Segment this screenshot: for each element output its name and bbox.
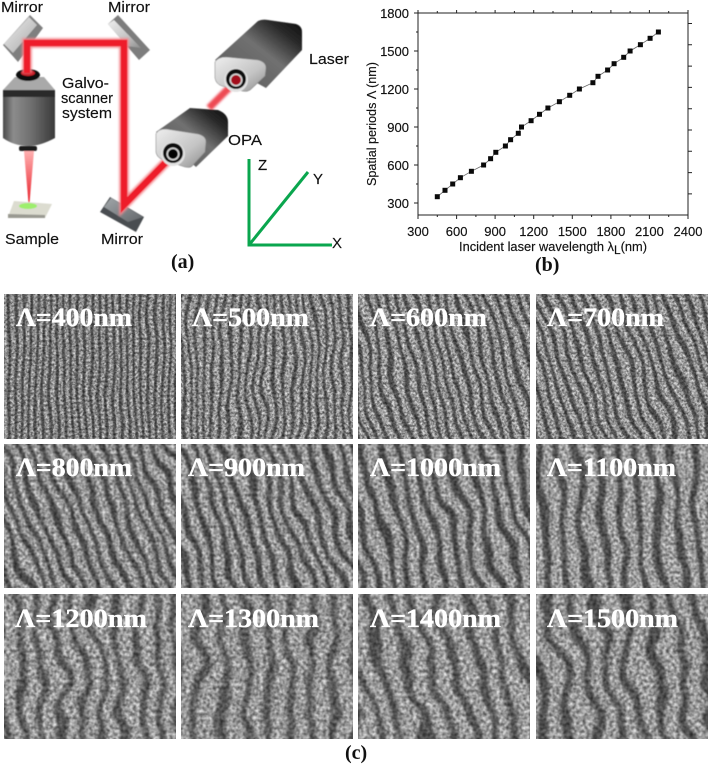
x axis tick labels xyxy=(407,224,702,239)
panel b: scatter chart xyxy=(364,6,702,257)
setup labels xyxy=(1,0,349,252)
micrograph 600nm: Λ=600nm xyxy=(370,303,487,332)
setup labels: OPA xyxy=(228,132,262,149)
y axis tick labels xyxy=(380,6,409,211)
icon: sample plate xyxy=(8,201,52,218)
panel c: SEM micrograph grid xyxy=(0,270,708,750)
micrograph 1300nm xyxy=(181,594,353,739)
y axis tick labels: 300 xyxy=(387,196,409,211)
micrograph 700nm: Λ=700nm xyxy=(547,303,664,332)
x axis title: Incident laser wavelength λ xyxy=(459,239,616,254)
y axis tick labels: 1200 xyxy=(380,82,409,97)
micrograph 1000nm: Λ=1000nm xyxy=(370,453,501,482)
setup labels: Mirror xyxy=(101,231,143,248)
data line xyxy=(437,32,658,197)
x axis tick labels: 1200 xyxy=(519,224,548,239)
data points xyxy=(435,30,661,199)
setup labels: scanner xyxy=(61,90,113,107)
setup labels: X xyxy=(332,235,342,252)
y axis tick labels: 900 xyxy=(387,120,409,135)
micrograph 400nm xyxy=(4,294,176,439)
y axis tick labels: 1800 xyxy=(380,6,409,21)
micrograph 500nm: Λ=500nm xyxy=(192,303,309,332)
micrograph 500nm xyxy=(181,294,353,439)
red laser beam path xyxy=(27,43,234,205)
x axis title: (nm) xyxy=(621,239,647,254)
icon: OPA box xyxy=(156,108,228,167)
setup labels: Laser xyxy=(309,51,349,68)
caption (b): (b) xyxy=(535,254,559,276)
micrograph 1400nm xyxy=(358,594,530,739)
micrograph 1100nm xyxy=(536,444,708,588)
x axis tick labels: 300 xyxy=(407,224,429,239)
caption (a): (a) xyxy=(171,251,194,273)
x axis tick labels: 2400 xyxy=(674,224,702,239)
xyz axes xyxy=(249,159,332,245)
icon: laser box xyxy=(215,20,302,92)
icon: top-right mirror xyxy=(108,15,150,60)
x axis title: L xyxy=(614,243,621,257)
micrograph 1500nm xyxy=(536,594,708,739)
y axis title: Spatial periods Λ (nm) xyxy=(364,62,379,186)
icon: top-left mirror xyxy=(3,15,43,62)
y axis tick labels: 1500 xyxy=(380,44,409,59)
caption (c): (c) xyxy=(345,742,367,764)
panel a: optical setup diagram xyxy=(1,0,349,252)
x axis tick labels: 1500 xyxy=(558,224,587,239)
x axis tick labels: 1800 xyxy=(596,224,625,239)
setup labels: Sample xyxy=(5,231,59,248)
setup labels: Galvo- xyxy=(62,75,109,92)
micrograph 800nm xyxy=(4,444,176,588)
micrograph 900nm xyxy=(181,444,353,588)
micrograph 1200nm: Λ=1200nm xyxy=(15,604,147,633)
x axis tick labels: 900 xyxy=(484,224,506,239)
icon: bottom mirror xyxy=(100,197,144,232)
icon: galvo-scanner body xyxy=(3,69,55,151)
micrograph 900nm: Λ=900nm xyxy=(188,453,305,482)
micrograph 1500nm: Λ=1500nm xyxy=(547,604,678,633)
x axis tick labels: 600 xyxy=(446,224,467,239)
x axis tick labels: 2100 xyxy=(635,224,664,239)
micrograph 800nm: Λ=800nm xyxy=(16,453,132,482)
micrograph 1400nm: Λ=1400nm xyxy=(370,604,501,633)
micrograph 600nm xyxy=(358,294,530,439)
micrograph 700nm xyxy=(536,294,708,439)
micrograph 1000nm xyxy=(358,444,530,588)
micrograph 1200nm xyxy=(4,594,176,739)
setup labels: Y xyxy=(313,171,323,188)
y axis tick labels: 600 xyxy=(387,158,409,173)
micrograph 400nm: Λ=400nm xyxy=(16,303,132,332)
chart frame and ticks xyxy=(414,10,692,219)
icon: red focusing cone xyxy=(24,151,34,203)
micrograph 1100nm: Λ=1100nm xyxy=(547,453,676,482)
setup labels: Z xyxy=(258,157,267,174)
micrograph 1300nm: Λ=1300nm xyxy=(188,604,319,633)
setup labels: system xyxy=(62,105,112,122)
